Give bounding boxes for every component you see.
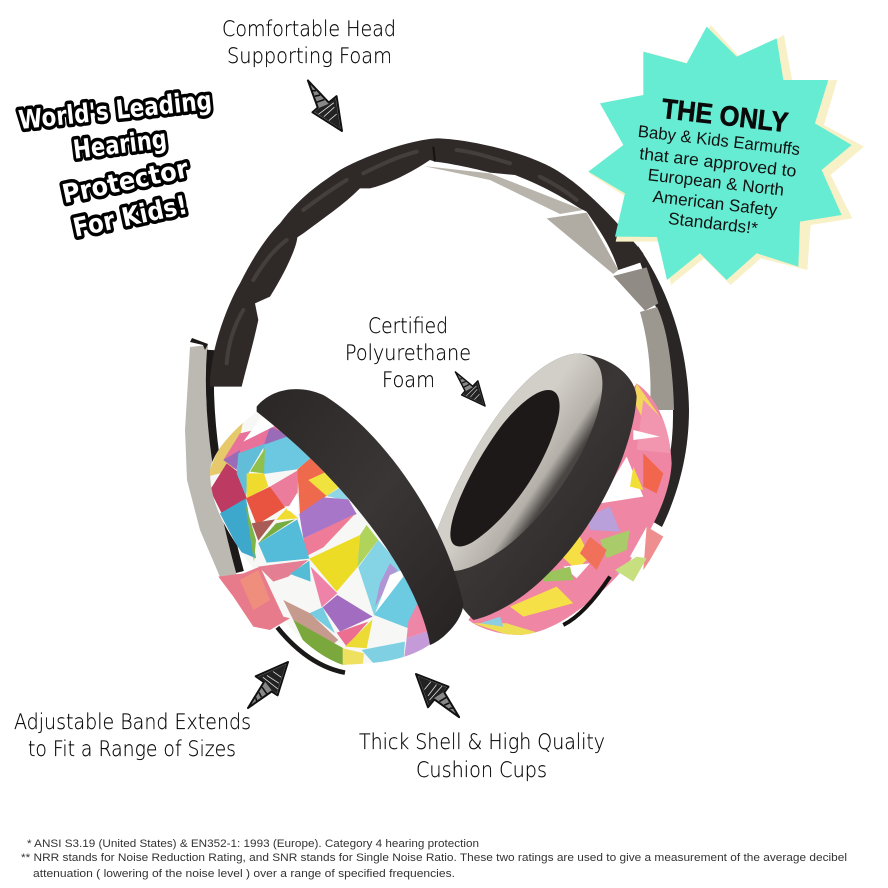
label: comfortable head supporting foam: Supporting Foam xyxy=(227,44,392,68)
footnotes: ** NRR stands for Noise Reduction Rating, and SNR stands for Single Noise Ratio. These two ratings are used to give a measurement of the average decibel xyxy=(21,852,847,864)
right cup patterned shell xyxy=(468,383,672,637)
heading: World's Leading Hearing Protector For Kids: Hearing xyxy=(72,124,169,166)
starburst badge xyxy=(588,25,864,285)
star body xyxy=(588,27,852,280)
star body text xyxy=(637,122,801,238)
left cup coral slider clip xyxy=(218,567,290,630)
label: adjustable band: to Fit a Range of Sizes xyxy=(28,737,236,761)
label: comfortable head supporting foam xyxy=(222,17,396,68)
left cup black cushion xyxy=(257,389,463,645)
headphone right arm xyxy=(638,246,689,527)
heading: World's Leading Hearing Protector For Kids: Protector xyxy=(60,154,191,210)
label: certified polyurethane foam: Certified xyxy=(368,314,448,338)
footnotes: attenuation ( lowering of the noise level ) over a range of specified frequencies. xyxy=(33,868,455,880)
star body text: European & North xyxy=(647,165,785,200)
left cup patterned shell xyxy=(207,412,433,673)
label: certified polyurethane foam xyxy=(345,314,471,392)
star body text: Baby & Kids Earmuffs xyxy=(637,122,801,159)
label: thick shell xyxy=(359,730,605,782)
headphone left arm xyxy=(185,338,240,577)
label: certified polyurethane foam: Foam xyxy=(382,368,435,392)
headband padded foam xyxy=(210,138,643,387)
label: thick shell: Thick Shell & High Quality xyxy=(359,730,605,754)
arrow: to cushion cup xyxy=(405,664,469,728)
star shadow xyxy=(589,25,864,285)
right cup ear opening xyxy=(450,390,560,546)
arrow: to headband foam xyxy=(296,72,354,139)
label: adjustable band xyxy=(14,710,251,761)
footnotes xyxy=(21,838,847,880)
star heading: THE ONLY xyxy=(660,93,790,138)
label: thick shell: Cushion Cups xyxy=(416,758,547,782)
arrow: to ear foam xyxy=(448,365,493,413)
right cup black cushion xyxy=(432,353,637,620)
right cup grey foam xyxy=(431,353,602,571)
heading: World's Leading Hearing Protector For Kids: For Kids! xyxy=(70,190,190,244)
right ear cup xyxy=(431,353,672,637)
arrow: to adjustable band xyxy=(237,652,299,717)
headband grey inner straps xyxy=(423,166,658,311)
heading: World's Leading Hearing Protector For Kids: World's Leading xyxy=(17,86,213,136)
label: adjustable band: Adjustable Band Extends xyxy=(14,710,251,734)
left ear cup xyxy=(207,389,463,673)
label: certified polyurethane foam: Polyurethane xyxy=(345,341,471,365)
heading: World's Leading Hearing Protector For Kids xyxy=(17,86,213,244)
star body text: American Safety xyxy=(652,187,779,220)
band strap xyxy=(277,627,345,673)
star body text: Standards!* xyxy=(667,209,759,238)
star body text: that are approved to xyxy=(638,144,798,181)
footnotes: * ANSI S3.19 (United States) & EN352-1: 1993 (Europe). Category 4 hearing protection xyxy=(27,838,479,850)
label: comfortable head supporting foam: Comfortable Head xyxy=(222,17,396,41)
